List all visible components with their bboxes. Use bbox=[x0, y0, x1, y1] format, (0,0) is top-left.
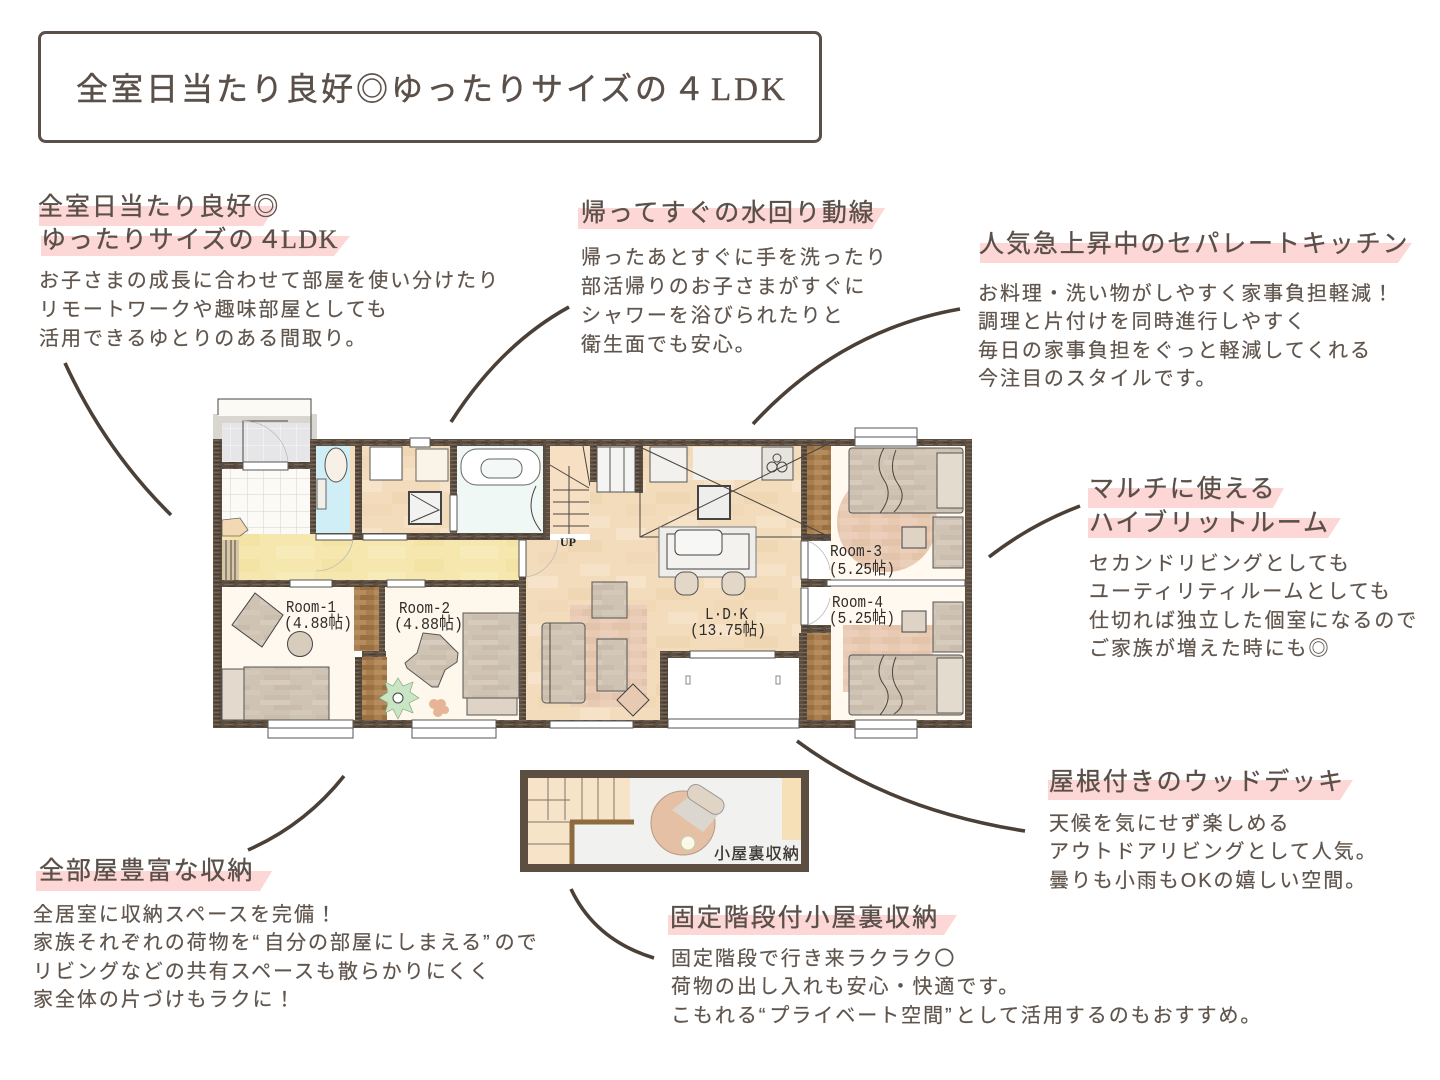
room labels: Room-2 bbox=[399, 600, 450, 619]
callout: sunlight and 4LDK: リモートワークや趣味部屋としても bbox=[39, 298, 389, 321]
callout: storage: 全部屋豊富な収納 bbox=[39, 857, 254, 885]
attic rug and chair bbox=[651, 781, 727, 855]
callout: separate kitchen: 今注目のスタイルです。 bbox=[978, 367, 1217, 390]
callout: storage: 全居室に収納スペースを完備！ bbox=[33, 903, 338, 926]
leader line: hybrid room bbox=[989, 506, 1080, 557]
floor plan: main floor bbox=[213, 399, 972, 738]
room labels: (13.75帖) bbox=[690, 620, 766, 641]
room 3 floor bbox=[830, 446, 966, 579]
room 2 furniture bbox=[379, 613, 519, 719]
callout: water circulation: 帰ってすぐの水回り動線 bbox=[581, 199, 876, 227]
shoe cabinet bbox=[222, 518, 248, 580]
callout: attic storage: 荷物の出し入れも安心・快適です。 bbox=[671, 975, 1020, 998]
walls bbox=[213, 439, 972, 728]
room 4 floor bbox=[830, 587, 966, 721]
callout: sunlight and 4LDK: LDK bbox=[281, 225, 339, 254]
room 1 floor bbox=[222, 587, 355, 721]
room labels: (5.25帖) bbox=[829, 559, 895, 580]
entrance porch bbox=[213, 399, 317, 463]
callout: sunlight and 4LDK bbox=[38, 193, 500, 350]
callout: sunlight and 4LDK: 全室日当たり良好◎ bbox=[38, 193, 280, 221]
room labels: (4.88帖) bbox=[394, 614, 463, 635]
callout: hybrid room: セカンドリビングとしても bbox=[1089, 552, 1351, 575]
callout: storage bbox=[33, 857, 539, 1011]
room 1 furniture bbox=[222, 593, 329, 720]
bathroom bbox=[457, 446, 544, 534]
room 2 floor bbox=[380, 587, 520, 721]
callout: wood deck: 天候を気にせず楽しめる bbox=[1049, 812, 1290, 835]
callout: hybrid room: ハイブリットルーム bbox=[1089, 509, 1330, 537]
callout: separate kitchen: 人気急上昇中のセパレートキッチン bbox=[979, 230, 1409, 258]
room labels: L·D·K bbox=[705, 606, 749, 625]
room labels: Room-1 bbox=[286, 599, 336, 618]
leader line: wood deck bbox=[797, 741, 1025, 831]
leader line: water circulation bbox=[451, 307, 569, 422]
callout: wood deck: アウトドアリビングとして人気。 bbox=[1049, 840, 1378, 863]
callout: attic storage: 固定階段で行き来ラクラク〇 bbox=[671, 947, 956, 970]
callout: attic storage: こもれる“プライベート空間”として活用するのもおすすめ。 bbox=[671, 1004, 1262, 1027]
callout: attic storage bbox=[668, 904, 1262, 1027]
room labels: (5.25帖) bbox=[829, 608, 895, 629]
callout: storage: 家族それぞれの荷物を“自分の部屋にしまえる”ので bbox=[33, 931, 539, 954]
toilet room bbox=[316, 446, 355, 534]
callout: water circulation: 帰ったあとすぐに手を洗ったり bbox=[581, 246, 888, 269]
room labels: UP bbox=[560, 535, 576, 549]
title box bbox=[40, 32, 820, 142]
leader line: kitchen bbox=[753, 309, 960, 424]
wood deck bbox=[668, 658, 799, 720]
leader line: attic bbox=[571, 889, 654, 958]
callout: hybrid room: 仕切れば独立した個室になるので bbox=[1089, 609, 1418, 632]
leader line: storage bbox=[248, 776, 344, 850]
callout: hybrid room: ユーティリティルームとしても bbox=[1089, 581, 1392, 603]
closet lattice bbox=[597, 447, 635, 492]
callout: hybrid room bbox=[1088, 475, 1418, 660]
washroom bbox=[362, 446, 451, 534]
attic closet bbox=[782, 778, 801, 840]
entrance tiles bbox=[222, 469, 311, 534]
closets bbox=[354, 446, 831, 721]
callout: sunlight and 4LDK: ゆったりサイズの bbox=[41, 226, 255, 254]
room labels bbox=[284, 535, 895, 641]
callout: water circulation: シャワーを浴びられたりと bbox=[581, 304, 844, 327]
living furniture bbox=[542, 582, 649, 716]
callout: hybrid room: ご家族が増えた時にも◎ bbox=[1089, 637, 1330, 660]
callout: water circulation: 衛生面でも安心。 bbox=[581, 333, 757, 356]
callout: separate kitchen: 調理と片付けを同時進行しやすく bbox=[978, 310, 1307, 333]
doors and windows bbox=[243, 421, 965, 738]
room labels: Room-3 bbox=[830, 543, 882, 562]
callout: wood deck: 屋根付きのウッドデッキ bbox=[1049, 768, 1345, 796]
callout: sunlight and 4LDK: ４ bbox=[257, 226, 284, 254]
callout: separate kitchen: 毎日の家事負担をぐっと軽減してくれる bbox=[978, 339, 1372, 362]
callout: separate kitchen bbox=[978, 230, 1412, 390]
room 4 furniture bbox=[843, 602, 963, 715]
callout: separate kitchen: お料理・洗い物がしやすく家事負担軽減！ bbox=[978, 282, 1395, 305]
hallway bbox=[222, 534, 520, 581]
title box: 全室日当たり良好◎ゆったりサイズの bbox=[76, 71, 670, 107]
title box: ４ bbox=[673, 71, 708, 107]
room labels: (4.88帖) bbox=[284, 613, 352, 634]
staircase bbox=[550, 446, 590, 534]
kitchen island bbox=[659, 527, 756, 595]
callout: sunlight and 4LDK: お子さまの成長に合わせて部屋を使い分けたり bbox=[39, 269, 500, 292]
kitchen bbox=[640, 443, 830, 537]
callout: wood deck: 曇りも小雨もOKの嬉しい空間。 bbox=[1049, 869, 1367, 892]
callout: hybrid room: マルチに使える bbox=[1089, 475, 1277, 503]
callout: water circulation: 部活帰りのお子さまがすぐに bbox=[581, 275, 866, 298]
callout: sunlight and 4LDK: 活用できるゆとりのある間取り。 bbox=[39, 327, 367, 350]
callout: wood deck bbox=[1048, 768, 1378, 892]
leader line: sunlight bbox=[65, 363, 171, 515]
room 3 furniture bbox=[837, 448, 963, 572]
callout: water circulation bbox=[578, 199, 888, 356]
LDK floor bbox=[526, 446, 804, 721]
attic stairs bbox=[528, 778, 634, 864]
callout: attic storage: 固定階段付小屋裏収納 bbox=[670, 904, 939, 932]
floor plan: attic storage bbox=[520, 770, 809, 872]
room labels: Room-4 bbox=[832, 594, 883, 613]
callout: storage: 家全体の片づけもラクに！ bbox=[33, 988, 296, 1011]
callout: storage: リビングなどの共有スペースも散らかりにくく bbox=[33, 960, 491, 983]
title box: LDK bbox=[711, 72, 788, 108]
attic label: 小屋裏収納 bbox=[714, 845, 800, 863]
